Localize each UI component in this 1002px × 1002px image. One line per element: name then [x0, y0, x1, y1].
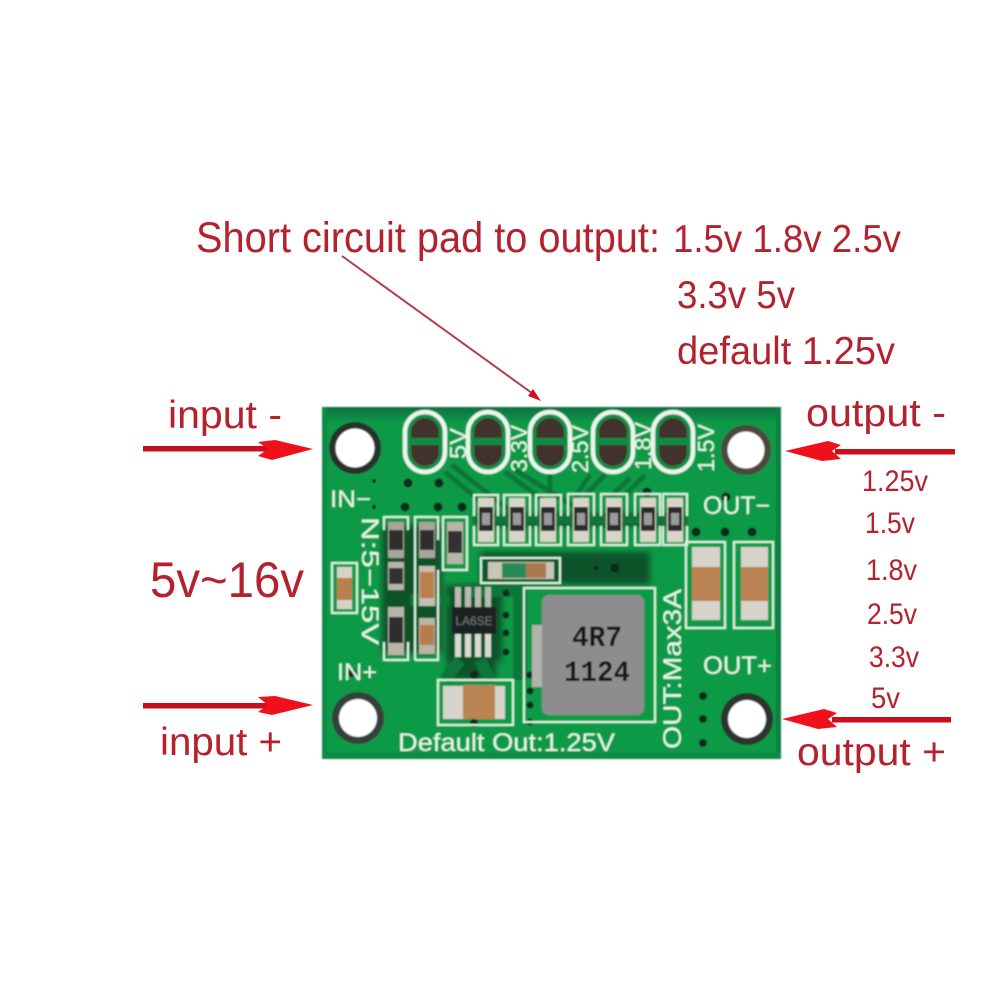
- dark component shadows: [382, 514, 686, 680]
- output voltage list: 1.25v: [862, 465, 928, 498]
- vias: [348, 478, 756, 747]
- top resistor row: [474, 494, 687, 545]
- output plus label: output +: [797, 731, 946, 774]
- inductor: 4R7: [572, 622, 622, 656]
- heading: short circuit pad instructions: Short circuit pad to output:: [196, 214, 660, 262]
- heading: short circuit pad instructions: 1.5v 1.8v 2.5v: [673, 218, 901, 261]
- input minus label: input -: [168, 394, 282, 437]
- IC chip: [452, 587, 496, 657]
- voltage range label: 5v~16v: [150, 552, 304, 608]
- board silkscreen labels: Default Out:1.25V: [398, 729, 615, 757]
- output minus label: output -: [806, 392, 946, 435]
- inductor: 1124: [564, 657, 630, 691]
- heading: short circuit pad instructions: 3.3v 5v: [677, 274, 795, 317]
- right capacitors: [686, 542, 773, 628]
- board silkscreen labels: [330, 486, 772, 757]
- board silkscreen labels: N:5−15V: [356, 517, 383, 645]
- pad voltage labels: 3.3V: [506, 424, 532, 472]
- pad voltage labels: 1.8V: [630, 421, 656, 470]
- mounting holes: [329, 422, 773, 745]
- pad voltage labels: 1.5V: [693, 423, 719, 472]
- dark copper traces: [410, 465, 687, 680]
- output minus arrow: [785, 441, 955, 461]
- pad voltage labels: [445, 421, 719, 473]
- left capacitor: [332, 563, 357, 613]
- output voltage list: 3.3v: [869, 641, 919, 674]
- board silkscreen labels: OUT−: [703, 492, 770, 520]
- board substrate: [322, 407, 781, 759]
- input minus arrow: [143, 440, 313, 460]
- board silkscreen labels: IN+: [337, 659, 377, 686]
- heading: short circuit pad instructions: [196, 214, 901, 373]
- output voltage list: [862, 465, 928, 715]
- board silkscreen labels: OUT:Max3A: [659, 589, 687, 749]
- output voltage list: 1.8v: [866, 554, 917, 587]
- board silkscreen labels: OUT+: [703, 652, 772, 680]
- left component columns: [384, 517, 467, 660]
- output plus arrow: [782, 709, 951, 729]
- inductor: [524, 588, 655, 722]
- bottom capacitor: [438, 680, 513, 725]
- IC chip: LA6SE: [455, 614, 493, 628]
- output voltage list: 1.5v: [865, 507, 915, 540]
- output voltage list: 5v: [871, 682, 900, 715]
- pad voltage labels: 5V: [445, 427, 471, 459]
- horizontal resistor: [481, 558, 560, 583]
- output voltage list: 2.5v: [867, 598, 917, 631]
- short circuit pads: [405, 412, 693, 472]
- pointer arrow to pads: [342, 256, 541, 401]
- pad voltage labels: 2.5V: [567, 424, 593, 473]
- heading: short circuit pad instructions: default 1.25v: [677, 330, 895, 373]
- PCB board: [322, 407, 781, 759]
- input plus label: input +: [160, 721, 282, 764]
- board silkscreen labels: IN−: [330, 486, 371, 513]
- input plus arrow: [143, 696, 313, 715]
